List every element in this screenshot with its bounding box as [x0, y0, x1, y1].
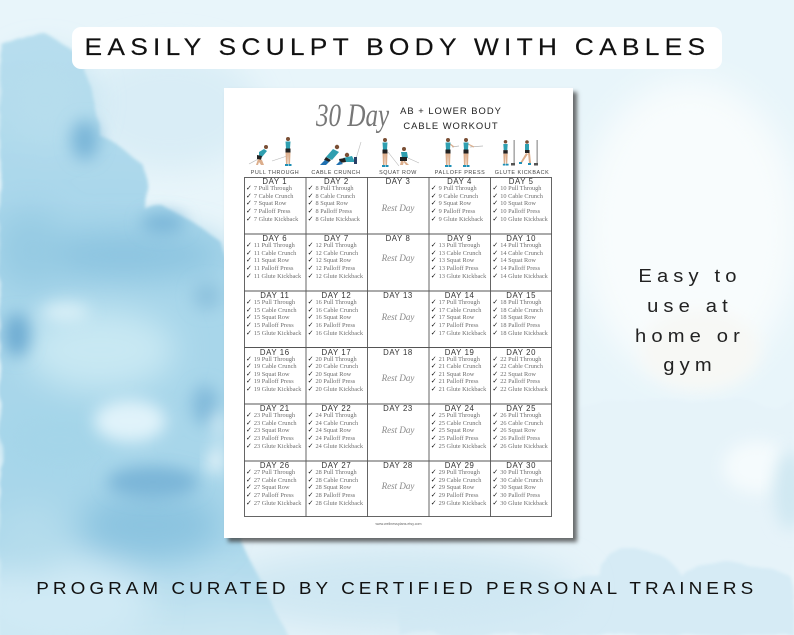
table: 30 day calendar: ✓ 8 Cable Crunch [308, 192, 355, 200]
table: 30 day calendar: ✓ 9 Glute Kickback [431, 215, 483, 223]
table: 30 day calendar: ✓ 13 Glute Kickback [431, 272, 486, 280]
row 3: ✓ 15 Palloff Press [246, 321, 294, 329]
row 4: ✓ 19 Cable Crunch [246, 362, 297, 370]
table: 30 day calendar: DAY 3 [386, 177, 410, 186]
row 2: ✓ 11 Cable Crunch [246, 249, 296, 257]
table: 30 day calendar: ✓ 30 Pull Through [492, 468, 541, 476]
table: 30 day calendar: ✓ 8 Glute Kickback [308, 215, 360, 223]
row 1: ✓ 7 Palloff Press [246, 207, 290, 215]
table: 30 day calendar: ✓ 12 Glute Kickback [308, 272, 363, 280]
table: 30 day calendar: ✓ 30 Palloff Press [492, 491, 540, 499]
table: 30 day calendar: ✓ 13 Pull Through [431, 241, 480, 249]
table: 30 day calendar: ✓ 13 Palloff Press [431, 264, 478, 272]
icon: squat row [382, 138, 419, 167]
row 3: ✓ 15 Glute Kickback [246, 329, 301, 337]
heading: workout name: AB + LOWER BODY [400, 105, 502, 116]
table: 30 day calendar: ✓ 21 Pull Through [431, 355, 480, 363]
table: 30 day calendar: ✓ 30 Squat Row [492, 483, 536, 491]
table: 30 day calendar: ✓ 16 Palloff Press [308, 321, 355, 329]
table: 30 day calendar: ✓ 14 Glute Kickback [492, 272, 548, 280]
website footer: www.wellnessplans.etsy.com [375, 522, 422, 526]
table: 30 day calendar: ✓ 12 Cable Crunch [308, 249, 358, 257]
table: 30 day calendar: DAY 17 [322, 348, 351, 356]
table: 30 day calendar: ✓ 30 Glute Kickback [492, 499, 548, 507]
table: 30 day calendar: DAY 28 [383, 461, 413, 470]
row 2: ✓ 11 Pull Through [246, 241, 295, 249]
table: 30 day calendar: ✓ 29 Glute Kickback [431, 499, 486, 507]
table: 30 day calendar: ✓ 10 Glute Kickback [492, 215, 548, 223]
table: 30 day calendar: ✓ 29 Palloff Press [431, 491, 478, 499]
table: 30 day calendar: ✓ 18 Palloff Press [492, 321, 540, 329]
table: 30 day calendar: ✓ 24 Squat Row [308, 426, 351, 434]
row 4: ✓ 19 Pull Through [246, 355, 295, 363]
table: 30 day calendar: ✓ 16 Glute Kickback [308, 329, 363, 337]
table: 30 day calendar: ✓ 26 Pull Through [492, 411, 541, 419]
table: 30 day calendar: ✓ 29 Squat Row [431, 483, 474, 491]
icon: glute kickback [503, 140, 538, 166]
table: 30 day calendar: ✓ 29 Pull Through [431, 468, 480, 476]
table: 30 day calendar: Rest Day [382, 481, 414, 491]
table: 30 day calendar: ✓ 20 Cable Crunch [308, 362, 358, 370]
table: 30 day calendar: ✓ 16 Pull Through [308, 298, 357, 306]
table: 30 day calendar: DAY 4 [447, 177, 472, 186]
table: 30 day calendar: ✓ 18 Cable Crunch [492, 306, 543, 314]
table: 30 day calendar: ✓ 25 Squat Row [431, 426, 474, 434]
table: 30 day calendar: ✓ 17 Cable Crunch [431, 306, 481, 314]
icons: exercise figures [249, 137, 538, 167]
table: 30 day calendar: Rest Day [382, 203, 414, 213]
row 4: ✓ 19 Squat Row [246, 370, 290, 378]
table: 30 day calendar: ✓ 16 Squat Row [308, 313, 351, 321]
row 1: ✓ 7 Cable Crunch [246, 192, 293, 200]
table: 30 day calendar: DAY 27 [322, 461, 351, 470]
table: 30 day calendar: ✓ 9 Squat Row [431, 199, 471, 207]
table: 30 day calendar: ✓ 17 Glute Kickback [431, 329, 486, 337]
icon: pull through [249, 137, 292, 166]
row 5: ✓ 23 Glute Kickback [246, 442, 301, 450]
row 5: ✓ 23 Palloff Press [246, 434, 294, 442]
table: 30 day calendar: DAY 22 [322, 404, 351, 413]
row 6: ✓ 27 Pull Through [246, 468, 295, 476]
table: 30 day calendar: ✓ 20 Squat Row [308, 370, 351, 378]
exercise labels [251, 170, 549, 176]
row 5: ✓ 23 Cable Crunch [246, 419, 297, 427]
side text: easy to use [635, 266, 745, 375]
table: 30 day calendar: ✓ 21 Glute Kickback [431, 385, 486, 393]
table: 30 day calendar: ✓ 14 Palloff Press [492, 264, 540, 272]
table: 30 day calendar: DAY 9 [447, 234, 472, 243]
row 3: ✓ 15 Squat Row [246, 313, 290, 321]
table: 30 day calendar: ✓ 28 Squat Row [308, 483, 351, 491]
row 1 [246, 177, 298, 223]
table: 30 day calendar: ✓ 26 Glute Kickback [492, 442, 548, 450]
table: 30 day calendar: ✓ 21 Squat Row [431, 370, 474, 378]
row 5 [246, 404, 302, 450]
table: 30 day calendar: ✓ 26 Palloff Press [492, 434, 540, 442]
table: 30 day calendar: ✓ 9 Pull Through [431, 184, 477, 192]
table: 30 day calendar: ✓ 16 Cable Crunch [308, 306, 358, 314]
table: 30 day calendar: ✓ 17 Squat Row [431, 313, 474, 321]
table: 30 day calendar: ✓ 28 Pull Through [308, 468, 357, 476]
table: 30 day calendar: ✓ 8 Pull Through [308, 184, 354, 192]
row 2: ✓ 11 Glute Kickback [246, 272, 301, 280]
table: 30 day calendar: ✓ 22 Squat Row [492, 370, 536, 378]
table: 30 day calendar: ✓ 10 Squat Row [492, 199, 536, 207]
table: 30 day calendar: ✓ 12 Squat Row [308, 256, 351, 264]
icon: cable crunch [320, 142, 361, 165]
table: 30 day calendar: ✓ 25 Glute Kickback [431, 442, 486, 450]
table: 30 day calendar: ✓ 25 Cable Crunch [431, 419, 481, 427]
row 3: ✓ 15 Pull Through [246, 298, 295, 306]
table: 30 day calendar: ✓ 20 Pull Through [308, 355, 357, 363]
side text: easy to use: Easy to [638, 266, 742, 286]
row 2: ✓ 11 Squat Row [246, 256, 289, 264]
table: 30 day calendar: ✓ 18 Squat Row [492, 313, 536, 321]
table: 30 day calendar: ✓ 14 Pull Through [492, 241, 541, 249]
row 1: ✓ 7 Squat Row [246, 199, 286, 207]
table: 30 day calendar: ✓ 20 Palloff Press [308, 377, 355, 385]
table: 30 day calendar: ✓ 28 Glute Kickback [308, 499, 363, 507]
table: 30 day calendar: DAY 18 [383, 348, 413, 356]
table: 30 day calendar: ✓ 28 Cable Crunch [308, 476, 358, 484]
table: 30 day calendar: Rest Day [382, 312, 414, 322]
table: 30 day calendar: ✓ 25 Pull Through [431, 411, 480, 419]
row 6: DAY 26 [260, 461, 290, 470]
table: 30 day calendar: ✓ 9 Palloff Press [431, 207, 475, 215]
table: 30 day calendar: DAY 19 [445, 348, 474, 356]
footer caption: PROGRAM CURATED BY CERTIFIED PERSONAL TRAINERS [37, 578, 757, 598]
side text: easy to use: home or [635, 326, 745, 346]
table: 30 day calendar [244, 177, 552, 517]
table: 30 day calendar: Rest Day [382, 372, 414, 382]
table: 30 day calendar: ✓ 8 Palloff Press [308, 207, 352, 215]
row 4: ✓ 19 Palloff Press [246, 377, 294, 385]
table: 30 day calendar: ✓ 24 Glute Kickback [308, 442, 363, 450]
table: 30 day calendar: ✓ 10 Cable Crunch [492, 192, 543, 200]
table: 30 day calendar: ✓ 14 Cable Crunch [492, 249, 543, 257]
table: 30 day calendar: DAY 25 [506, 404, 536, 413]
table: 30 day calendar: DAY 30 [506, 461, 536, 470]
row 5: ✓ 23 Squat Row [246, 426, 290, 434]
table: 30 day calendar: ✓ 25 Palloff Press [431, 434, 478, 442]
table: 30 day calendar: ✓ 21 Palloff Press [431, 377, 478, 385]
table: 30 day calendar: ✓ 13 Squat Row [431, 256, 474, 264]
row 5: ✓ 23 Pull Through [246, 411, 295, 419]
row 2: DAY 6 [262, 234, 287, 243]
table: 30 day calendar: ✓ 22 Cable Crunch [492, 362, 543, 370]
table: 30 day calendar: ✓ 12 Palloff Press [308, 264, 355, 272]
table: 30 day calendar: DAY 10 [506, 234, 536, 243]
heading: 30 Day script: 30 Day [316, 98, 389, 134]
row 2 [246, 234, 302, 280]
row 3: ✓ 15 Cable Crunch [246, 306, 297, 314]
row 2: ✓ 11 Palloff Press [246, 264, 293, 272]
row 3: DAY 11 [260, 291, 289, 300]
heading: workout name: CABLE WORKOUT [403, 120, 499, 131]
row 4 [246, 348, 302, 393]
table: 30 day calendar: ✓ 26 Cable Crunch [492, 419, 543, 427]
exercise labels: SQUAT ROW [379, 170, 417, 176]
row 1: DAY 1 [262, 177, 287, 186]
table: 30 day calendar: DAY 14 [445, 291, 474, 300]
table: 30 day calendar: DAY 8 [386, 234, 410, 243]
row 6: ✓ 27 Squat Row [246, 483, 290, 491]
table: 30 day calendar: ✓ 21 Cable Crunch [431, 362, 481, 370]
row 1: ✓ 7 Glute Kickback [246, 215, 298, 223]
table: 30 day calendar: DAY 24 [445, 404, 474, 413]
table: 30 day calendar: ✓ 9 Cable Crunch [431, 192, 478, 200]
icon: palloff press [445, 138, 483, 167]
row 6: ✓ 27 Palloff Press [246, 491, 294, 499]
side text: easy to use: gym [663, 355, 717, 375]
table: 30 day calendar: Rest Day [382, 425, 414, 435]
exercise labels: GLUTE KICKBACK [495, 170, 549, 176]
table: 30 day calendar: ✓ 10 Pull Through [492, 184, 541, 192]
exercise labels: PULL THROUGH [251, 170, 299, 176]
title banner: EASILY SCULPT BODY WITH CABLES [84, 34, 710, 61]
table: 30 day calendar: ✓ 10 Palloff Press [492, 207, 540, 215]
table: 30 day calendar: DAY 2 [324, 177, 349, 186]
table: 30 day calendar: DAY 29 [445, 461, 474, 470]
table: 30 day calendar: DAY 5 [509, 177, 534, 186]
row 4: DAY 16 [260, 348, 290, 356]
table: 30 day calendar: DAY 13 [383, 291, 413, 300]
table: 30 day calendar: DAY 7 [324, 234, 349, 243]
table: 30 day calendar: ✓ 20 Glute Kickback [308, 385, 363, 393]
row 4: ✓ 19 Glute Kickback [246, 385, 301, 393]
table: 30 day calendar: ✓ 22 Palloff Press [492, 377, 540, 385]
table: 30 day calendar: ✓ 24 Palloff Press [308, 434, 355, 442]
heading: workout name [400, 105, 502, 131]
table: 30 day calendar: ✓ 22 Pull Through [492, 355, 541, 363]
table: 30 day calendar: ✓ 24 Cable Crunch [308, 419, 358, 427]
row 6: ✓ 27 Glute Kickback [246, 499, 301, 507]
panel: workout calendar sheet [224, 88, 573, 538]
table: 30 day calendar: ✓ 13 Cable Crunch [431, 249, 481, 257]
table: 30 day calendar: ✓ 12 Pull Through [308, 241, 357, 249]
table: 30 day calendar: Rest Day [382, 253, 414, 263]
table: 30 day calendar: ✓ 14 Squat Row [492, 256, 536, 264]
title banner [72, 27, 722, 69]
row 1: ✓ 7 Pull Through [246, 184, 292, 192]
exercise labels: CABLE CRUNCH [311, 170, 361, 176]
row 3 [246, 291, 302, 337]
table: 30 day calendar: DAY 12 [322, 291, 351, 300]
exercise labels: PALLOFF PRESS [435, 170, 485, 176]
table: 30 day calendar: ✓ 26 Squat Row [492, 426, 536, 434]
side text: easy to use: use at [647, 296, 733, 316]
table: 30 day calendar: ✓ 29 Cable Crunch [431, 476, 481, 484]
table: 30 day calendar: ✓ 22 Glute Kickback [492, 385, 548, 393]
row 5: DAY 21 [260, 404, 290, 413]
table: 30 day calendar: ✓ 17 Pull Through [431, 298, 480, 306]
table: 30 day calendar: ✓ 28 Palloff Press [308, 491, 355, 499]
table: 30 day calendar: ✓ 8 Squat Row [308, 199, 348, 207]
table: 30 day calendar: ✓ 30 Cable Crunch [492, 476, 543, 484]
table: 30 day calendar: ✓ 24 Pull Through [308, 411, 357, 419]
table: 30 day calendar: DAY 20 [506, 348, 536, 356]
row 6: ✓ 27 Cable Crunch [246, 476, 297, 484]
table: 30 day calendar: ✓ 18 Glute Kickback [492, 329, 548, 337]
table: 30 day calendar: DAY 15 [506, 291, 536, 300]
row 6 [246, 461, 302, 507]
table: 30 day calendar: ✓ 17 Palloff Press [431, 321, 478, 329]
table: 30 day calendar: DAY 23 [383, 404, 413, 413]
table: 30 day calendar: ✓ 18 Pull Through [492, 298, 541, 306]
